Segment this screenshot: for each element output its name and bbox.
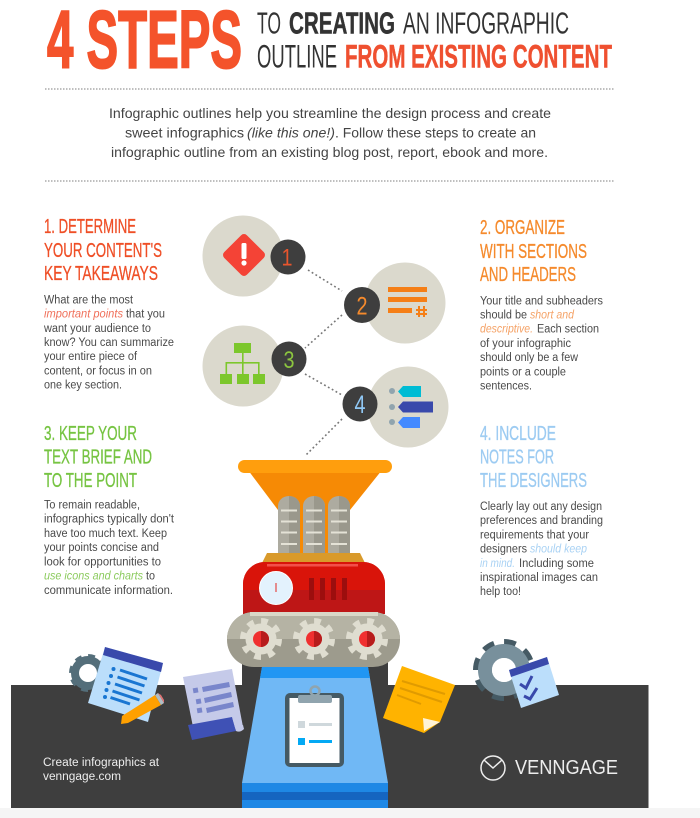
- step 3 body: To remain readable,: [44, 500, 140, 512]
- icon: document scroll: [183, 669, 244, 740]
- icon: text lines with hash: [388, 287, 427, 317]
- step 1 body: one key section.: [44, 379, 122, 391]
- step 2 text: [480, 217, 603, 392]
- badge 1: 1: [282, 244, 292, 272]
- step 2 body: [480, 296, 603, 392]
- title: [47, 0, 612, 86]
- step 1 body: that you: [126, 309, 165, 321]
- step 3 node: [202, 326, 306, 406]
- gear 3: [350, 622, 384, 656]
- conveyor: [227, 612, 400, 667]
- pencil: [121, 693, 164, 724]
- badge 2: 2: [356, 292, 368, 320]
- step 4 text: [480, 423, 603, 598]
- step 2 heading: AND HEADERS: [480, 264, 576, 286]
- icon: tagged list: [389, 386, 433, 428]
- badge 3: 3: [284, 347, 294, 374]
- step 1 body: important points: [44, 309, 123, 321]
- footer text: Create infographics at: [43, 757, 160, 769]
- step 3 heading: TEXT BRIEF AND: [44, 446, 152, 468]
- step 4 body: help too!: [480, 586, 521, 598]
- intro text: [109, 105, 551, 160]
- checklist card: [509, 657, 559, 708]
- step 1 heading: 1. DETERMINE: [44, 216, 136, 238]
- red body: [243, 562, 385, 614]
- step 3 body: have too much text. Keep: [44, 528, 167, 540]
- large gear: [478, 644, 530, 696]
- step 3 heading: 3. KEEP YOUR: [44, 423, 137, 445]
- step 1 body: content, or focus in on: [44, 365, 152, 377]
- step 4 body: [480, 501, 603, 598]
- venngage logo: VENNGAGE: [515, 757, 618, 779]
- step 2 body: points or a couple: [480, 366, 566, 378]
- tubes: [278, 496, 350, 553]
- step 2 body: Your title and subheaders: [480, 296, 603, 308]
- icon: gear and notepad with pencil: [73, 647, 164, 724]
- gear 1: [244, 622, 278, 656]
- dotted connectors: [305, 270, 342, 455]
- step 4 body: Including some: [519, 558, 594, 570]
- step 3 heading: [44, 423, 152, 492]
- step 4 body: preferences and branding: [480, 515, 603, 527]
- step 4 body: inspirational images can: [480, 572, 598, 584]
- step 3 body: communicate information.: [44, 585, 173, 597]
- step 2 body: should be: [480, 310, 527, 322]
- step 2 body: short and: [530, 310, 575, 322]
- gear 2: [296, 622, 332, 656]
- step 4 body: should keep: [530, 544, 588, 556]
- step 3 body: [44, 500, 175, 597]
- footer text: venngage.com: [43, 771, 121, 783]
- gauge: [260, 572, 292, 604]
- step 4 body: designers: [480, 544, 527, 556]
- step 3 body: to: [146, 571, 155, 583]
- step 1 body: What are the most: [44, 294, 134, 306]
- step 4 body: Clearly lay out any design: [480, 501, 602, 513]
- title: TO: [257, 6, 281, 40]
- icon: gear with checklist: [478, 644, 559, 708]
- step 3 body: look for opportunities to: [44, 556, 161, 568]
- icon: sticky note: [383, 666, 455, 733]
- step 3 body: infographics typically don't: [44, 514, 175, 526]
- step 1 heading: KEY TAKEAWAYS: [44, 263, 158, 285]
- step 2 body: sentences.: [480, 380, 532, 392]
- step 1 body: want your audience to: [43, 323, 151, 335]
- funnel: [238, 460, 392, 553]
- icon: org chart: [220, 343, 265, 384]
- blue base: [242, 667, 388, 808]
- lower legs: [242, 660, 388, 690]
- step 2 heading: 2. ORGANIZE: [480, 217, 565, 239]
- vents: [309, 578, 347, 600]
- step 3 heading: TO THE POINT: [44, 470, 137, 492]
- step 3 body: use icons and charts: [44, 571, 143, 583]
- intro text: Infographic outlines help you streamline the design process and create: [109, 105, 551, 121]
- machine: [227, 460, 400, 808]
- logo mark: [481, 756, 505, 780]
- step 1 body: your entire piece of: [44, 351, 138, 363]
- step 4 body: in mind.: [480, 558, 515, 570]
- title: AN INFOGRAPHIC: [403, 6, 569, 40]
- intro text: . Follow these steps to create an: [335, 124, 536, 140]
- step 2 body: should only be a few: [480, 352, 579, 364]
- step 3 body: your points concise and: [44, 542, 159, 554]
- step 4 heading: THE DESIGNERS: [480, 470, 587, 492]
- step 2 heading: [480, 217, 587, 286]
- step 1 node: [202, 216, 306, 296]
- step 1 body: know? You can summarize: [44, 337, 174, 349]
- title: CREATING: [289, 6, 395, 40]
- step 2 heading: WITH SECTIONS: [480, 241, 587, 263]
- step 3 text: [44, 423, 175, 597]
- badge 4: 4: [354, 391, 366, 419]
- step 1 body: [43, 294, 174, 391]
- step 4 node: [342, 366, 448, 448]
- notepad: [88, 647, 163, 722]
- intro text: (like this one!): [247, 124, 335, 140]
- intro text: infographic outline from an existing blog post, report, ebook and more.: [111, 144, 548, 160]
- icon: warning diamond: [221, 232, 267, 278]
- step 1 heading: YOUR CONTENT'S: [44, 240, 162, 262]
- venngage logo: [481, 756, 618, 780]
- step 2 body: descriptive.: [480, 324, 533, 336]
- step 2 body: of your infographic: [480, 338, 571, 350]
- step 1 heading: [44, 216, 162, 285]
- step 4 heading: [480, 423, 587, 492]
- step 1 text: [43, 216, 174, 391]
- step 2 body: Each section: [537, 324, 599, 336]
- step 2 node: [344, 262, 446, 344]
- small gear: [73, 658, 103, 688]
- intro text: sweet infographics: [125, 124, 244, 140]
- footer panel: [11, 685, 648, 808]
- step 4 heading: NOTES FOR: [480, 446, 554, 468]
- footer text: [43, 757, 160, 783]
- lid: [262, 553, 365, 563]
- clipboard: [285, 686, 344, 767]
- title: OUTLINE: [257, 38, 337, 74]
- step 4 heading: 4. INCLUDE: [480, 423, 556, 445]
- step 4 body: requirements that your: [480, 529, 589, 541]
